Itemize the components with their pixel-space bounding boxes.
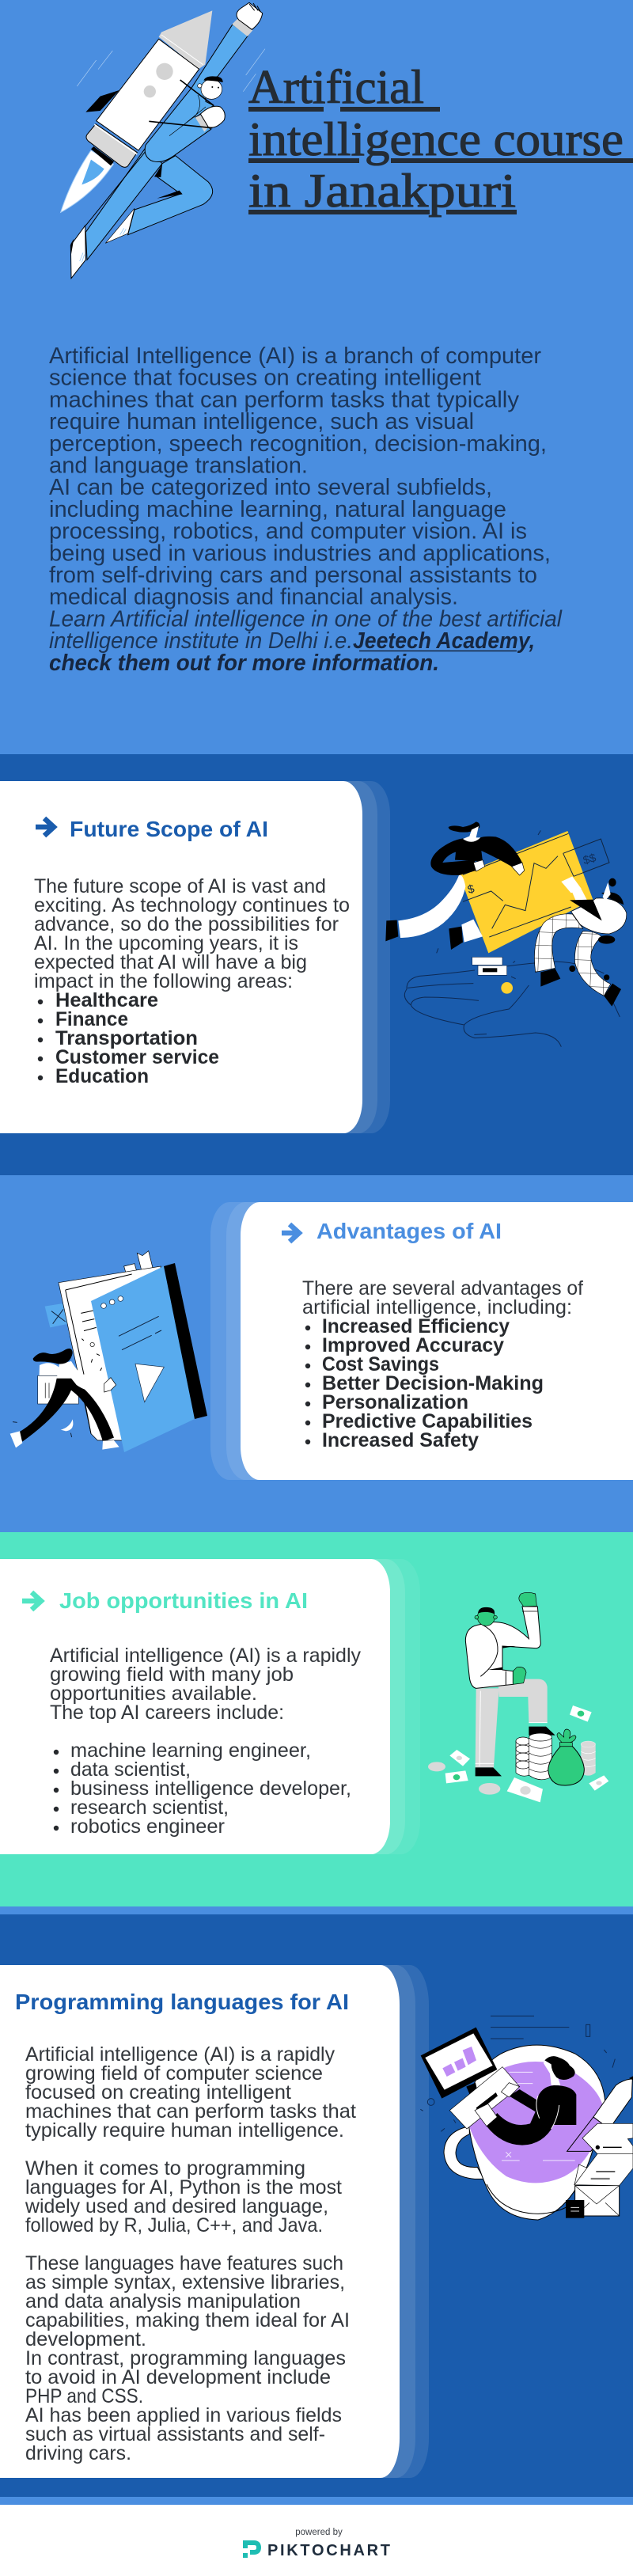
panel: advantages of AI [210,1202,633,1480]
text: job intro [50,1645,361,1724]
list: advantages: Increased Efficiency [322,1315,510,1337]
intro text block: and language translation. [49,453,308,478]
text: future scope intro: expected that AI will have a big [34,951,307,973]
title: Artificial [248,61,424,113]
text: programming languages body [25,2043,356,2464]
intro text block: check them out for more information. [49,651,439,676]
text: programming languages body: followed by R, Julia, C++, and Java. [25,2214,323,2236]
illustration: woman with big book [10,1251,207,1452]
text: programming languages body: machines that can perform tasks that [25,2100,356,2123]
illustration: woman working in a coffee cup [420,2016,633,2220]
intro text block: require human intelligence, such as visual [49,409,474,434]
intro text block: processing, robotics, and computer vision. AI is [49,519,527,544]
intro text block: perception, speech recognition, decision-making, [49,431,547,457]
illustration: man with money [428,1592,608,1802]
intro text block: from self-driving cars and personal assistants to [49,563,537,588]
text: future scope intro: exciting. As technology continues to [34,894,350,916]
list: advantages: Improved Accuracy [322,1334,504,1356]
heading: future scope: Future Scope of AI [70,817,268,841]
panel: programming languages for AI [0,1965,429,2478]
text: future scope intro [34,875,350,992]
heading: programming languages: Programming languages for AI [15,1990,349,2014]
text: programming languages body: driving cars. [25,2442,131,2464]
illustration: people carrying a yellow chart: $$ [582,852,597,867]
panel: job opportunities in AI [0,1559,420,1854]
text: future scope intro: advance, so do the possibilities for [34,913,339,935]
heading: job opportunities: Job opportunities in AI [59,1588,308,1613]
intro text block: science that focuses on creating intelligent [49,366,481,391]
list: future scope areas: Healthcare [55,989,158,1011]
panel: future scope of AI [0,781,390,1133]
list: future scope areas: Education [55,1065,149,1087]
list: advantages: Personalization [322,1391,468,1413]
text: programming languages body: capabilities, making them ideal for AI [25,2309,350,2331]
list: AI careers: robotics engineer [70,1815,225,1838]
text: programming languages body: development. [25,2328,146,2350]
text: job intro: opportunities available. [50,1683,257,1705]
intro text block: intelligence institute in Delhi i.e. [49,628,353,654]
text: programming languages body: widely used and desired language, [25,2195,328,2217]
intro text block: medical diagnosis and financial analysis. [49,585,458,610]
list: advantages: Predictive Capabilities [322,1410,533,1432]
list: AI careers: data scientist, [70,1758,191,1781]
list: future scope areas: Customer service [55,1046,219,1068]
title [248,61,633,217]
text: advantages intro: artificial intelligence, including: [302,1296,572,1318]
intro text block: machines that can perform tasks that typically [49,387,520,412]
text: future scope intro: The future scope of AI is vast and [34,875,326,897]
icon: arrow [22,1592,41,1610]
text: programming languages body: Artificial intelligence (AI) is a rapidly [25,2043,335,2066]
text: programming languages body: typically require human intelligence. [25,2119,344,2142]
list: advantages: Increased Safety [322,1429,479,1451]
list: AI careers: business intelligence developer, [70,1777,351,1800]
text: programming languages body: PHP and CSS. [25,2385,143,2407]
intro text block [49,343,563,676]
text: programming languages body: languages for AI, Python is the most [25,2176,342,2199]
text: programming languages body: such as virtual assistants and self- [25,2423,325,2445]
list: advantages: Cost Savings [322,1353,439,1375]
text: programming languages body: growing field of computer science [25,2062,323,2085]
text: programming languages body: AI has been applied in various fields [25,2404,342,2426]
text: powered by: powered by [295,2528,343,2537]
icon: piktochart logo [245,2543,259,2558]
icon: arrow [282,1224,299,1242]
intro text block: Jeetech Academy, [353,628,535,654]
text: advantages intro [302,1277,583,1318]
text: programming languages body: These languages have features such [25,2252,343,2274]
list: advantages: Better Decision-Making [322,1372,544,1394]
text: job intro: The top AI careers include: [50,1702,284,1724]
text: programming languages body: as simple syntax, extensive libraries, [25,2271,345,2293]
list: AI careers: machine learning engineer, [70,1739,311,1762]
icon: arrow [36,818,54,836]
list: AI careers [54,1739,351,1838]
text: future scope intro: AI. In the upcoming years, it is [34,932,298,954]
text: programming languages body: When it comes to programming [25,2157,305,2180]
wordmark: piktochart: PIKTOCHART [267,2542,390,2559]
text: job intro: Artificial intelligence (AI) is a rapidly [50,1645,361,1667]
footer: powered by Piktochart [245,2528,390,2559]
intro text block: Artificial Intelligence (AI) is a branch of computer [49,343,541,369]
intro text block: AI can be categorized into several subfields, [49,475,492,500]
list: future scope areas: Finance [55,1008,128,1030]
illustration: people carrying a yellow chart [385,821,627,1047]
intro text block: Learn Artificial intelligence in one of the best artificial [49,606,563,632]
text: future scope intro: impact in the following areas: [34,970,293,992]
title: intelligence course [248,113,624,165]
heading: advantages: Advantages of AI [316,1219,502,1243]
list: AI careers: research scientist, [70,1796,229,1819]
title: in Janakpuri [248,165,516,217]
illustration: man flying with rocket [61,2,265,279]
text: programming languages body: focused on creating intelligent [25,2081,291,2104]
intro text block: including machine learning, natural language [49,497,506,522]
text: advantages intro: There are several advantages of [302,1277,583,1299]
intro text block: being used in various industries and applications, [49,541,551,566]
text: programming languages body: to avoid in AI development include [25,2366,331,2388]
list: future scope areas: Transportation [55,1027,198,1049]
text: programming languages body: and data analysis manipulation [25,2290,301,2312]
text: job intro: growing field with many job [50,1664,294,1686]
illustration: people carrying a yellow chart: $ [466,883,476,897]
list: future scope areas [38,989,219,1087]
text: programming languages body: In contrast, programming languages [25,2347,346,2369]
list: advantages [305,1315,544,1451]
